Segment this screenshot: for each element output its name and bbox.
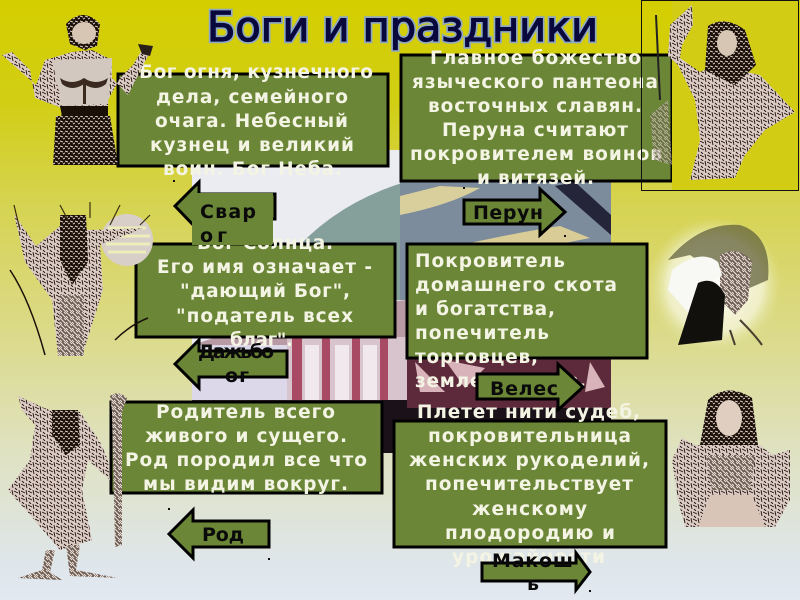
arrow: Dazhbog label: ог [225,365,249,387]
panel: Makosh description [394,402,666,568]
panel: Dazhbog description [136,233,395,351]
icon: Rod figure with staff [8,393,127,580]
arrow: Veles label [477,364,583,410]
panel: Perun description: Главное божество [430,48,641,69]
panel: Rod description [111,402,382,495]
panel: Veles description: торговцев, [415,347,538,368]
icon: Veles figure with animal [647,217,783,353]
panel: Rod description: мы видим вокруг. [143,474,348,495]
icon: Svarog figure [2,15,153,165]
panel: Dazhbog description: "дающий Бог", [180,281,350,302]
panel: Svarog description: кузнец и великий [150,135,354,156]
arrow: Makosh label [482,550,590,595]
panel: Veles description [407,244,647,392]
panel: Makosh description: покровительница [428,426,631,447]
panel: Makosh description: урожайности [452,547,605,568]
panel: Svarog description: Бог огня, кузнечного [139,62,373,83]
panel: Svarog description [118,62,388,180]
heading: Боги и праздники [207,3,598,51]
selection handle dots [168,180,591,592]
panel: Veles description: и богатства, [415,299,555,320]
arrow: Veles label: Велес [490,378,558,400]
panel: Dazhbog description: Бог Солнца. [197,233,333,254]
arrow: Perun label: Перун [473,202,543,224]
panel: Rod description: Родитель всего [156,402,335,423]
panel: Veles description: Покровитель [415,251,565,272]
arrow: Svarog label: ог [200,225,227,247]
panel: Makosh description: Плетет нити судеб, [417,402,640,423]
panel: Dazhbog description: "податель всех [176,306,353,327]
panel: Perun description: покровителем воинов [410,144,662,165]
icon: Perun figure in frame [642,0,798,190]
panel: Makosh description: женских рукоделий, [409,450,649,471]
arrow: Svarog label [175,182,275,247]
panel: Perun description: и витязей. [477,168,594,189]
heading: Боги и праздники [207,3,598,51]
panel: Makosh description: женскому [472,499,587,520]
panel: Veles description: земледельцев. [415,371,586,392]
arrow: Rod label: Род [202,524,244,546]
panel: Svarog description: очага. Небесный [155,111,348,132]
arrow: Dazhbog label: Дажьбо [198,341,274,363]
panel: Perun description: языческого пантеона [412,72,658,93]
photo: festival scene [192,150,611,453]
panel: Svarog description: дела, семейного [156,87,348,108]
icon: Dazhbog figure with sun [10,202,153,356]
arrow: Makosh label: Макош [492,550,573,572]
panel: Veles description: домашнего скота [415,275,617,296]
icon: Makosh figure [672,390,790,527]
panel: Veles description: попечитель [415,323,549,344]
panel: Svarog description: воин. Бог Неба. [163,159,342,180]
arrow: Rod label [169,510,269,558]
arrow: Dazhbog label [175,340,287,388]
panel: Makosh description: попечительствует [425,474,633,495]
panel: Rod description: Род породил все что [125,450,367,471]
panel: Dazhbog description: благ". [230,330,293,351]
arrow: Makosh label: ь [527,573,539,595]
panel: Perun description: Перуна считают [442,120,628,141]
panel: Rod description: живого и сущего. [145,426,347,447]
panel: Makosh description: плодородию и [445,523,615,544]
arrow: Perun label [464,189,565,235]
arrow: Svarog label: Свар [200,201,256,223]
panel: Perun description: восточных славян. [428,96,642,117]
panel: Perun description [401,48,672,189]
panel: Dazhbog description: Его имя означает - [157,257,372,278]
